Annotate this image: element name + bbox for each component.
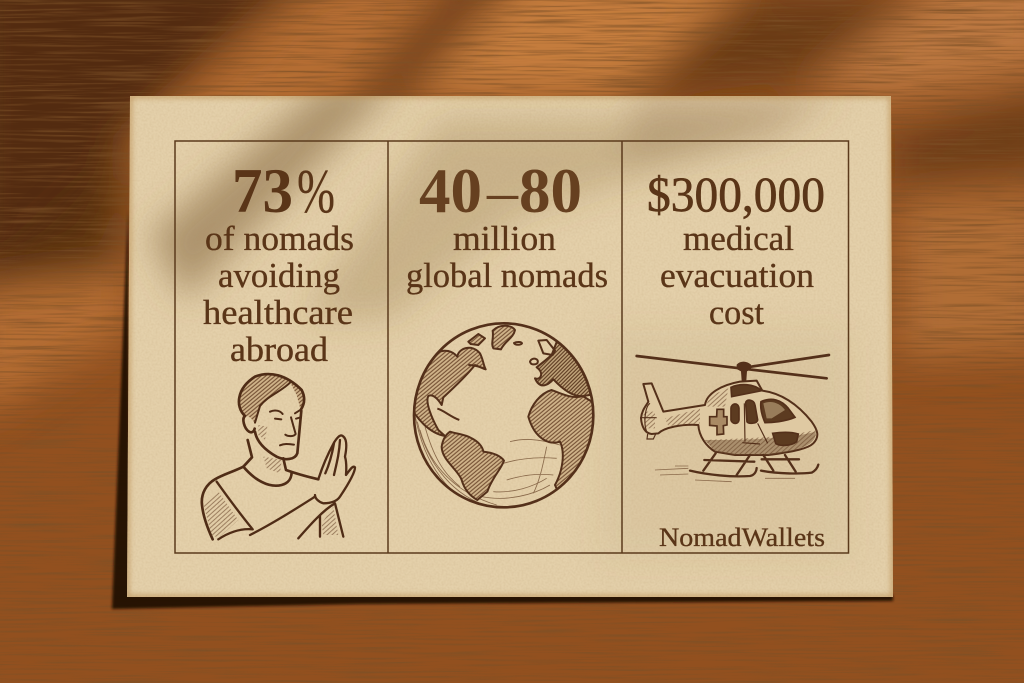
statistic: 40–80 xyxy=(419,156,582,226)
statistic: 40–80: 40 xyxy=(419,156,482,226)
label: of nomads avoiding healthcare abroad: avoiding xyxy=(218,256,340,295)
brand: NomadWallets: NomadWallets xyxy=(659,523,825,552)
label: medical evacuation cost: evacuation xyxy=(660,256,814,295)
globe shading lines xyxy=(415,416,560,506)
europe and asia xyxy=(534,342,590,398)
label: medical evacuation cost xyxy=(660,219,814,332)
windows xyxy=(731,385,798,445)
statistic: 73% xyxy=(232,156,335,226)
label: medical evacuation cost: cost xyxy=(709,293,764,332)
label: of nomads avoiding healthcare abroad: of nomads xyxy=(205,219,354,258)
label: million global nomads: million xyxy=(453,219,556,258)
label: of nomads avoiding healthcare abroad: healthcare xyxy=(203,293,353,332)
panel frame with three columns xyxy=(175,141,848,553)
icon: helicopter xyxy=(637,355,829,482)
africa xyxy=(527,389,592,489)
north america xyxy=(407,348,486,436)
greenland and arctic island xyxy=(468,326,515,349)
statistic: $300,000: $300,000 xyxy=(647,166,825,222)
statistic: 40–80: – xyxy=(486,158,519,226)
rotor xyxy=(637,355,829,378)
medical cross xyxy=(710,409,727,435)
statistic: 73%: 73 xyxy=(232,156,293,226)
label: of nomads avoiding healthcare abroad: abroad xyxy=(230,330,329,369)
paper card shadow xyxy=(112,210,893,609)
icon: globe xyxy=(407,323,600,507)
statistic: 40–80: 80 xyxy=(519,156,582,226)
icon: person raising hand xyxy=(202,374,355,539)
label: million global nomads xyxy=(406,219,608,295)
ground lines xyxy=(655,466,795,482)
small islands xyxy=(437,340,555,420)
panel: 40-80 million nomads xyxy=(406,156,608,507)
panel: 73% avoiding healthcare xyxy=(202,156,355,539)
landing skids xyxy=(690,453,818,476)
statistic: 73%: % xyxy=(297,158,335,226)
south america xyxy=(442,432,504,500)
label: million global nomads: global nomads xyxy=(406,256,608,295)
panel: $300,000 evacuation xyxy=(637,166,829,552)
label: medical evacuation cost: medical xyxy=(683,219,794,258)
fuselage xyxy=(641,381,817,455)
globe outline xyxy=(414,323,593,507)
paper card xyxy=(127,80,893,598)
label: of nomads avoiding healthcare abroad xyxy=(203,219,354,369)
